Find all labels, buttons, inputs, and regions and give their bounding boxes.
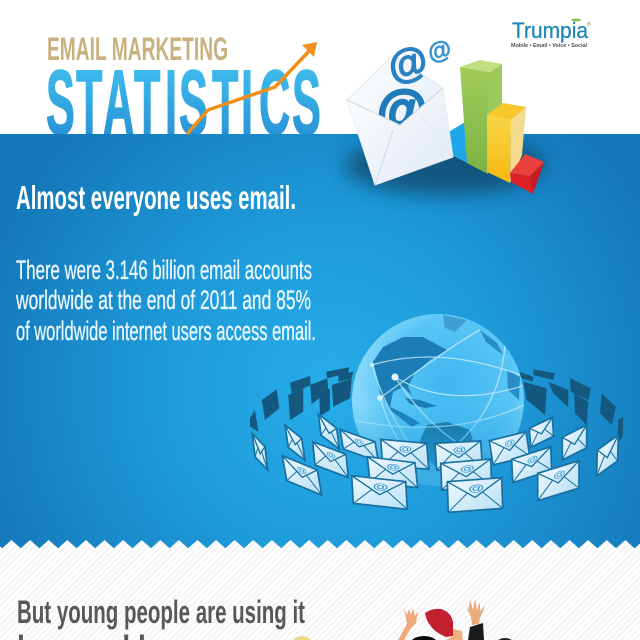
greenland [443,315,467,332]
envelopes ring: @ [398,444,413,454]
yellow bar [487,103,526,183]
heading: young people [17,594,305,640]
envelopes ring: @ [504,438,516,449]
right hand [466,599,485,625]
icon: bar chart [447,60,544,194]
envelopes ring: @ [460,463,475,474]
south america [420,422,473,466]
envelopes ring: @ [386,463,401,472]
text block: email accounts: There were 3.146 billion email accounts [16,255,312,285]
black hair [409,636,439,640]
black sleeve [468,623,484,640]
hand under cap [446,629,463,640]
icon: globe [352,314,525,486]
caribbean [405,398,437,408]
small at sign: @ [425,35,454,67]
red bar [510,154,544,194]
left hand and arm [398,608,418,640]
envelope back [347,55,453,185]
north america [373,337,447,427]
envelope front pocket [347,88,453,185]
connection arcs [354,330,524,442]
heading: almost everyone: Almost everyone uses email. [16,179,296,216]
text block: email accounts: of worldwide internet users access email. [16,316,316,346]
europe [480,330,503,355]
shadow under envelope and bars [345,135,545,195]
logo: Trumpia: Trumpia [512,18,589,43]
envelopes ring [252,414,618,512]
envelopes ring: @ [354,436,365,447]
envelopes ring: @ [453,445,467,455]
logo: Trumpia: ® [587,21,591,28]
title line: Email Marketing: EMAIL MARKETING [47,31,228,67]
logo: Trumpia: Mobile • Email • Voice • Social [511,43,587,49]
at sign in envelope: @ [377,80,427,140]
envelopes ring: @ [468,482,484,494]
text block: email accounts [15,255,316,346]
red cap [425,609,453,637]
heading: young people: But young people are using it [17,594,305,630]
envelopes ring: @ [553,468,565,481]
envelopes ring: @ [527,454,539,466]
africa [507,370,520,400]
panel: blue background with zigzag edge [0,134,640,550]
green bar [460,60,502,174]
icon: open envelope with at signs [347,35,454,185]
text block: email accounts: worldwide at the end of 2011 and 85% [15,285,311,315]
large at sign: @ [384,38,432,90]
dark envelopes behind the globe [250,367,623,443]
envelopes ring: @ [326,449,336,461]
panel: striped lower section [0,535,640,640]
title line: Statistics: STATISTICS [46,52,321,154]
icon: yellow figure top [290,636,314,640]
illustration: cheering people [398,599,514,640]
envelopes ring: @ [372,481,389,492]
icon: rising orange arrow [187,42,317,134]
title [46,31,321,154]
second figure hair [496,638,514,640]
envelopes ring: @ [296,464,308,477]
blue bar [447,122,467,163]
